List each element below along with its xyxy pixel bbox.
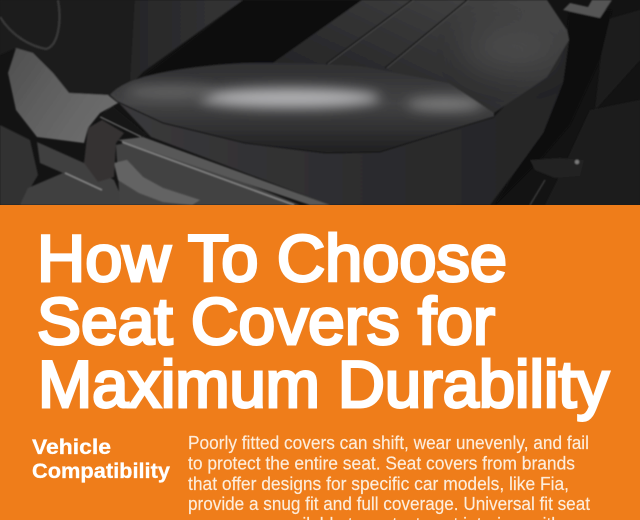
- mount: [20, 142, 125, 205]
- title: How To Choose: [37, 221, 507, 295]
- orange panel: [0, 205, 640, 520]
- top right bracket: [563, 0, 612, 18]
- body text: [188, 433, 590, 520]
- seat bolt: [530, 158, 584, 178]
- rear cushion stitch lines: [326, 0, 467, 68]
- carpet lower right: [545, 100, 640, 205]
- title: Maximum Durability: [38, 347, 609, 421]
- front cushion highlights: [125, 85, 483, 111]
- title: [37, 221, 609, 421]
- backrest ring trim: [0, 0, 60, 49]
- rear cushion panel: [273, 0, 569, 113]
- cushion piping: [118, 102, 494, 153]
- rail: [118, 137, 330, 205]
- upper right floor: [595, 10, 640, 110]
- front cushion roll: [110, 63, 494, 153]
- rail lower body: [116, 140, 300, 205]
- section heading: vehicle compatibility: Compatibility: [32, 460, 170, 483]
- side column right: [495, 10, 612, 205]
- strap: [84, 120, 124, 182]
- body text: provide a snug fit and full coverage. Universal fit seat: [188, 494, 590, 514]
- title: Seat Covers for: [37, 284, 495, 358]
- floor carpet left: [0, 125, 38, 205]
- dark wedge behind cushion: [143, 0, 362, 77]
- release tab: [100, 106, 147, 137]
- rear cushion sheen: [465, 28, 555, 72]
- seat side fabric: [118, 40, 569, 205]
- body text: that offer designs for specific car models, like Fia,: [188, 474, 569, 494]
- seat side plastic trim: [8, 48, 118, 143]
- section heading: vehicle compatibility: [32, 436, 170, 483]
- photo: car seat with black leather cover: [0, 0, 640, 205]
- section heading: vehicle compatibility: Vehicle: [32, 436, 111, 459]
- body text: to protect the entire seat. Seat covers from brands: [188, 454, 575, 474]
- lever: [114, 160, 200, 205]
- backrest side bolster: [0, 0, 140, 95]
- backrest face: [130, 0, 243, 85]
- body text: Poorly fitted covers can shift, wear unevenly, and fail: [188, 433, 589, 453]
